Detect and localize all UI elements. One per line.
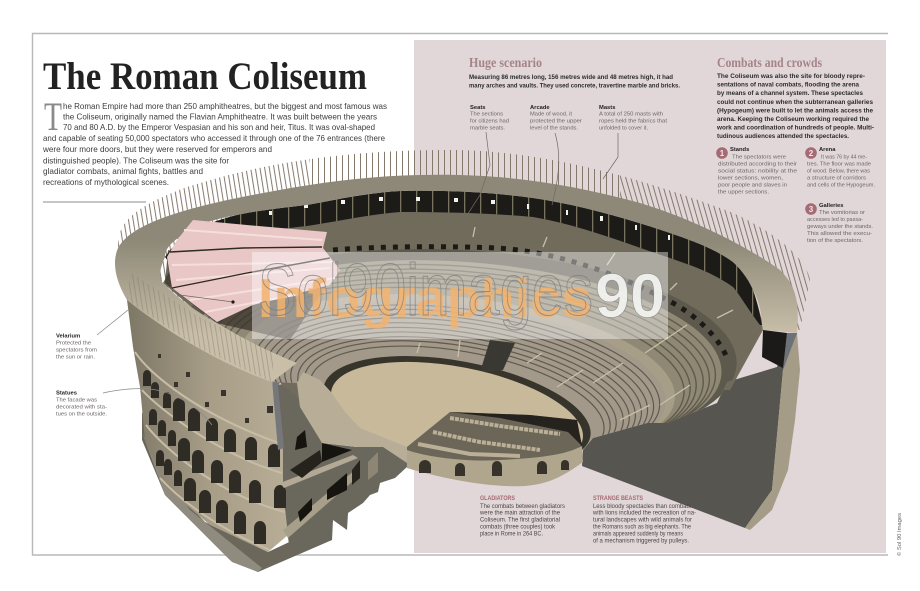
block: strange beasts: Less bloody spectacles than combats <box>593 503 691 510</box>
text: combats and crowds: tudinous audiences attended the spectacles. <box>717 133 849 140</box>
block: gladiators: were the main attraction of the <box>479 510 561 517</box>
masts fence <box>118 150 810 330</box>
item 1: stands: Stands <box>730 147 749 153</box>
block: strange beasts: STRANGE BEASTS <box>593 496 643 502</box>
callout: seats: marble seats. <box>470 126 505 132</box>
right cut opening <box>762 330 787 368</box>
upper storey windows <box>158 354 273 423</box>
text: combats and crowds: (Hypogeum) were built to let the animals access the <box>717 108 873 114</box>
callout: velarium: Protected the <box>56 340 91 346</box>
velarium shadow <box>165 250 330 340</box>
block: gladiators: The combats between gladiators <box>480 503 565 510</box>
watermark panel: Infographics <box>258 267 592 329</box>
callout: masts: A total of 250 masts with <box>599 112 663 118</box>
arcade third level <box>143 370 280 467</box>
callout: arcade: protected the upper <box>530 118 582 124</box>
item 1: stands: 1 <box>720 149 725 158</box>
callout: arcade: Arcade <box>530 105 550 111</box>
intro text: recreations of mythological scenes. <box>43 177 169 187</box>
right cut edge <box>783 333 797 370</box>
divider rule <box>43 202 146 203</box>
text: combats and crowds: The Coliseum was also the site for bloody repre- <box>717 73 865 80</box>
intro text: the Coliseum, originally named the Flavian Amphitheatre. It was built between the years <box>63 112 377 122</box>
callout: statues <box>56 390 107 418</box>
leader: velarium point <box>180 295 235 304</box>
item 3: galleries <box>805 203 873 244</box>
illustration: Coliseum cutaway <box>100 140 820 572</box>
callout: velarium <box>56 334 97 360</box>
text: combats and crowds: work and coordination of hundreds of people. Multi- <box>716 124 874 132</box>
callout: masts: Masts <box>599 105 615 111</box>
base lower plate <box>142 432 262 572</box>
credit: © Sol 90 Images <box>896 513 903 556</box>
item 2: arena: and cells of the Hypogeum. <box>807 183 875 189</box>
text: combats and crowds: by means of a channel system. These spectacles <box>717 90 863 97</box>
rim walkway <box>115 175 798 382</box>
text: combats and crowds: sentations of naval combats, flooding the arena <box>717 82 859 88</box>
callout: seats: Seats <box>470 105 485 111</box>
callout: masts <box>599 105 667 132</box>
gallery wall openings <box>333 247 727 358</box>
block: strange beasts: tural landscapes with wild animals for <box>593 516 692 524</box>
block: strange beasts <box>592 496 696 544</box>
item 3: galleries: accesses led to passa- <box>807 217 863 223</box>
item 2: arena: 2 <box>809 149 814 158</box>
block: strange beasts: of a mechanism triggered by pulleys. <box>593 538 689 544</box>
leader: masts <box>603 133 618 179</box>
item 1: stands: the upper sections. <box>718 190 769 196</box>
item 2: arena: It was 76 by 44 me- <box>821 155 867 161</box>
title: The Roman Coliseum <box>43 55 367 98</box>
cornices <box>135 352 285 550</box>
leader: arcade <box>552 133 559 205</box>
callout: velarium: Velarium <box>56 334 80 340</box>
callout: arcade <box>530 105 582 132</box>
callout: statues: The facade was <box>56 398 97 404</box>
item 1: stands: social status: nobility at the <box>718 169 797 175</box>
callout: masts: ropes held the fabrics that <box>599 118 667 124</box>
callout: velarium: spectators from <box>56 348 97 354</box>
block: gladiators: combats (three couples) took <box>480 524 556 530</box>
text: huge scenario <box>469 74 680 90</box>
intro text <box>42 101 387 187</box>
block: strange beasts: the Romans such as big elephants. The <box>593 524 692 530</box>
text: combats and crowds: arena. Keeping the Coliseum working required the <box>717 116 869 123</box>
block: gladiators: GLADIATORS <box>480 496 515 502</box>
block: gladiators: Coliseum. The first gladiatorial <box>480 516 560 524</box>
arcade second level <box>149 409 286 508</box>
section wall behind <box>273 383 407 552</box>
text: huge scenario: many arches and vaults. They used concrete, travertine marble and bricks. <box>469 82 680 90</box>
drop cap: T <box>44 94 62 139</box>
text: huge scenario: Measuring 86 metres long, 156 metres wide and 48 metres high, it had <box>469 74 673 81</box>
block: gladiators <box>479 496 565 538</box>
stepped cross-section <box>272 372 378 538</box>
item 1: stands: lower sections, women, <box>718 176 783 182</box>
item 3: galleries: The vomitorias or <box>819 210 865 216</box>
dark floor plane <box>582 333 797 528</box>
callout: statues: tues on the outside. <box>56 412 107 418</box>
text: combats and crowds <box>716 73 874 140</box>
intro text: were four more doors, but they were reserved for emperors and <box>42 144 272 154</box>
callout: velarium: the sun or rain. <box>56 354 95 360</box>
stands seating <box>191 249 736 450</box>
arcade columns <box>165 191 762 325</box>
item 3: galleries: tion of the spectators. <box>807 238 863 244</box>
item 1: stands <box>716 147 797 196</box>
item 2: arena: a structure of corridors <box>807 176 866 182</box>
item 1: stands: distributed according to their <box>718 162 797 168</box>
item 2: arena: of wood. Below, there was <box>807 169 870 175</box>
right outer wall <box>745 333 800 530</box>
callout: arcade: Made of wood, it <box>530 112 572 118</box>
intro text: and capable of seating 50,000 spectators who accessed it through one of the 76 entrances (there <box>43 133 385 143</box>
imperial box <box>480 340 515 372</box>
callout: seats: The sections <box>470 112 503 118</box>
heading: huge scenario: Huge scenario <box>469 56 542 71</box>
hypogeum <box>407 412 583 486</box>
front ledge ring <box>297 372 407 463</box>
item 3: galleries: Galleries <box>819 203 844 209</box>
intro text: he Roman Empire had more than 250 amphitheatres, but the biggest and most famous was <box>63 101 387 111</box>
stair spokes <box>417 227 733 420</box>
block: gladiators: place in Rome in 264 BC. <box>480 530 543 538</box>
item 3: galleries: geways under the stands. <box>807 224 873 230</box>
base plinth <box>142 412 332 572</box>
panel: pink background <box>414 40 886 553</box>
leader: seats <box>462 132 490 223</box>
upper arcade dark band <box>165 191 762 325</box>
intro text: gladiator combats, animal fights, battles and <box>43 166 203 176</box>
item 3: galleries: This allowed the execu- <box>807 231 872 237</box>
intro text: distinguished people). The Coliseum was the site for <box>43 156 229 166</box>
item 1: stands: poor people and slaves in <box>718 183 787 189</box>
arcade window lights <box>269 197 670 240</box>
text: combats and crowds: could not continue when the subterranean galleries <box>717 99 873 106</box>
front masts <box>127 272 274 382</box>
block: strange beasts: animals appeared suddenly by means <box>593 530 683 538</box>
intro text: 70 and 80 A.D. by the Emperor Vespasian and his son and heir, Titus. It was oval-shaped <box>63 122 375 132</box>
item 1: stands: The spectators were <box>732 155 786 161</box>
arcade first level <box>156 450 266 544</box>
leader: statues <box>103 389 212 425</box>
item 2: arena: Arena <box>819 147 836 153</box>
callout: masts: unfolded to cover it. <box>599 126 648 132</box>
callout: seats: for citizens had <box>470 118 509 124</box>
item 2: arena: tres. The floor was made <box>807 162 871 168</box>
watermark panel: 90 <box>595 262 665 331</box>
arena floor <box>322 343 592 487</box>
facade <box>127 300 288 552</box>
watermark panel: Sol90images <box>258 250 593 331</box>
item 2: arena <box>805 147 875 189</box>
heading: combats and crowds: Combats and crowds <box>717 56 822 71</box>
hypogeum outer ring <box>407 446 583 486</box>
callout: statues: Statues <box>56 390 77 396</box>
back interior terrace <box>163 200 763 400</box>
velarium awning <box>167 220 340 322</box>
callout: arcade: level of the stands. <box>530 126 578 132</box>
item 3: galleries: 3 <box>809 205 814 214</box>
callout: statues: decorated with sta- <box>56 404 107 410</box>
leader: velarium <box>97 310 128 335</box>
block: strange beasts: with lions included the recreation of na- <box>592 510 696 517</box>
callout: seats <box>470 105 509 132</box>
